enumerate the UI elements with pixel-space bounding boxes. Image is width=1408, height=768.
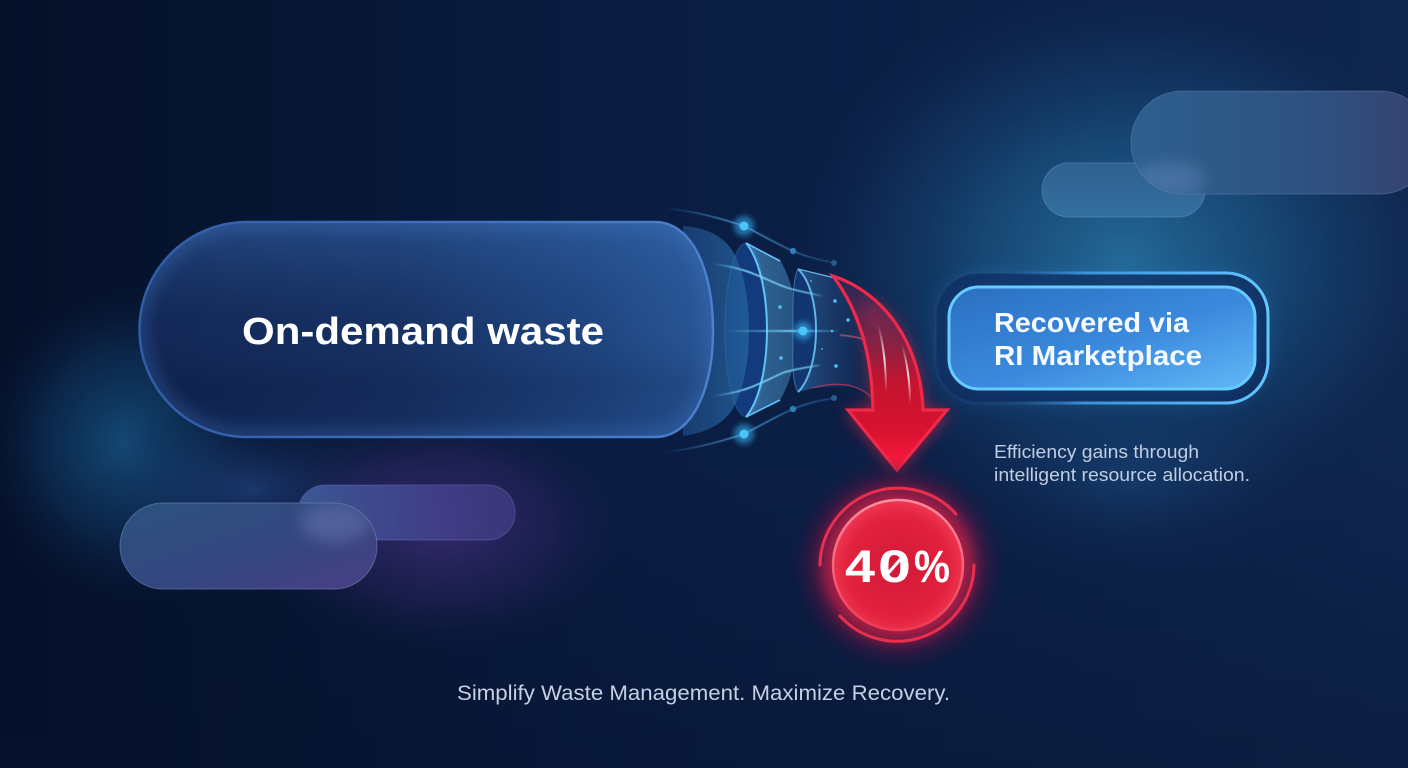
badge value: %: [914, 541, 950, 592]
funnel: [665, 208, 873, 452]
badge value: 4: [845, 541, 875, 592]
badge value: 0: [878, 541, 911, 592]
heading: on-demand waste: On-demand waste: [242, 311, 604, 353]
callout: recovered via RI Marketplace: [936, 273, 1268, 403]
red arrow: [833, 276, 950, 472]
flow lines: [665, 208, 868, 452]
callout label: Recovered via: [994, 307, 1189, 338]
supporting text: efficiency gains: intelligent resource allocation.: [994, 465, 1250, 485]
badge value: [845, 541, 950, 592]
decorative glass pills, bottom left: [120, 485, 515, 589]
supporting text: efficiency gains: Efficiency gains through: [994, 442, 1199, 462]
glowing nodes: [734, 216, 850, 444]
decorative glass pills, top right: [1042, 91, 1408, 217]
main pill: on-demand waste: [140, 222, 713, 437]
first funnel ring: [683, 226, 797, 436]
ghost pill section: [683, 226, 749, 436]
tagline: Simplify Waste Management. Maximize Recovery.: [457, 682, 950, 705]
badge: 40 percent: [790, 457, 1006, 673]
arrow highlights: [878, 325, 910, 460]
callout label: RI Marketplace: [994, 340, 1202, 371]
second funnel ring and tail: [793, 269, 873, 400]
